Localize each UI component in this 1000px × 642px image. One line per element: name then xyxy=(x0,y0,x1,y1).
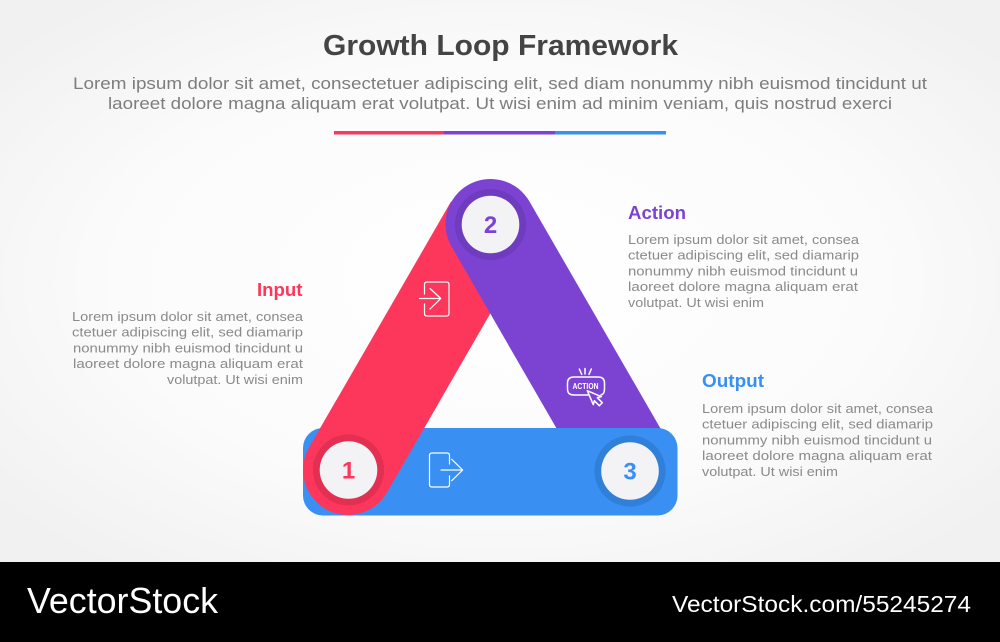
subtitle text xyxy=(73,74,927,113)
body text: input: nonummy nibh euismod tincidunt u xyxy=(73,340,303,356)
body text: action: Lorem ipsum dolor sit amet, consea xyxy=(628,232,860,247)
circle 3 xyxy=(594,435,666,507)
triangle loop diagram xyxy=(303,189,678,516)
body text: input: volutpat. Ut wisi enim xyxy=(167,372,303,387)
footer url text: VectorStock.com/55245274 xyxy=(672,591,971,617)
body text: action xyxy=(628,232,860,310)
body text: output: ctetuer adipiscing elit, sed diamarip xyxy=(702,416,933,432)
subtitle text: Lorem ipsum dolor sit amet, consectetuer adipiscing elit, sed diam nonummy nibh euismod tincidunt ut xyxy=(73,74,927,93)
body text: output: volutpat. Ut wisi enim xyxy=(702,464,838,479)
body text: action: nonummy nibh euismod tincidunt u xyxy=(628,264,858,278)
heading: input: Input xyxy=(257,280,303,300)
body text: input: ctetuer adipiscing elit, sed diamarip xyxy=(72,324,303,340)
block: input xyxy=(72,280,304,387)
body text: output: laoreet dolore magna aliquam erat xyxy=(702,448,932,463)
block: output xyxy=(702,371,934,479)
band: action purple xyxy=(490,224,625,457)
block: action xyxy=(628,203,860,310)
body text: output: nonummy nibh euismod tincidunt u xyxy=(702,432,932,448)
body text: action: ctetuer adipiscing elit, sed diamarip xyxy=(628,248,859,262)
circle 2 xyxy=(455,189,526,260)
circle 2: 2 xyxy=(484,212,497,239)
footer logo text: VectorStock xyxy=(27,580,219,621)
subtitle text: laoreet dolore magna aliquam erat volutpat. Ut wisi enim ad minim veniam, quis nostrud exerci xyxy=(108,94,892,113)
icon: action button: ACTION xyxy=(572,382,599,391)
icon: output arrow xyxy=(430,453,463,487)
icon: action button xyxy=(568,368,604,406)
body text: output: Lorem ipsum dolor sit amet, consea xyxy=(702,401,934,416)
band: input red, upper part xyxy=(348,224,490,470)
tricolor divider xyxy=(334,131,666,134)
footer bar xyxy=(0,562,1000,642)
title: Growth Loop Framework xyxy=(323,30,679,62)
circle 1: 1 xyxy=(342,458,355,484)
body text: input: laoreet dolore magna aliquam erat xyxy=(73,356,303,371)
circle 3: 3 xyxy=(623,458,637,486)
band: output blue xyxy=(303,428,678,516)
icon: input arrow xyxy=(420,282,449,316)
body text: action: laoreet dolore magna aliquam erat xyxy=(628,279,858,294)
heading: action: Action xyxy=(628,203,686,223)
band: input red, lower part xyxy=(303,400,440,515)
body text: action: volutpat. Ut wisi enim xyxy=(628,295,764,310)
heading: output: Output xyxy=(702,371,764,391)
body text: input: Lorem ipsum dolor sit amet, consea xyxy=(72,309,304,324)
circle 1 xyxy=(313,434,384,506)
body text: output xyxy=(702,401,934,479)
body text: input xyxy=(72,309,304,387)
